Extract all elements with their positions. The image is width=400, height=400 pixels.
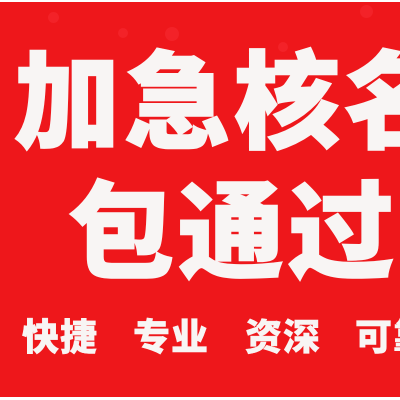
headline: second line: 包通过 bbox=[68, 175, 398, 293]
feature: fast: 快捷 bbox=[22, 317, 98, 358]
feature: experienced: 资深 bbox=[245, 317, 321, 358]
feature: professional: 专业 bbox=[133, 317, 209, 358]
